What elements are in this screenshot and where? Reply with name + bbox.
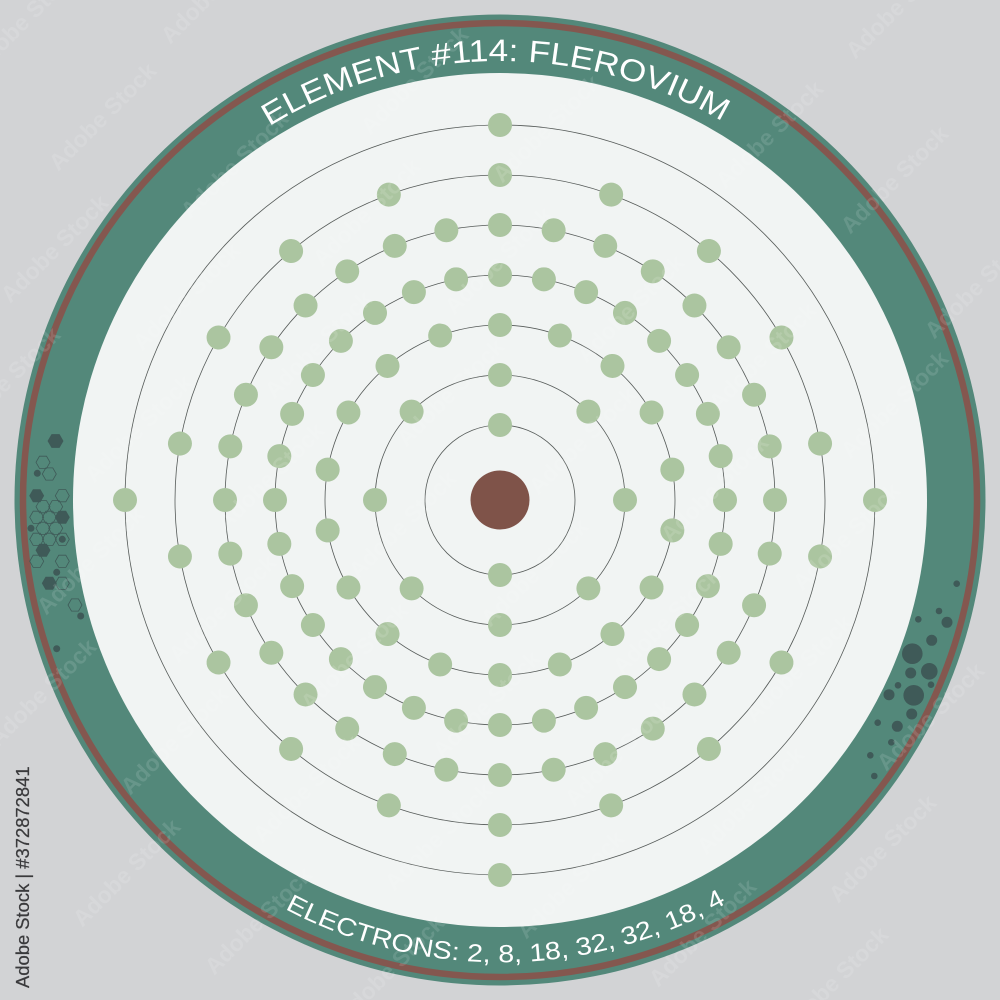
watermark: repeated Adobe Stock text: Adobe Stock <box>691 741 809 859</box>
watermark: repeated Adobe Stock text: Adobe Stock <box>295 597 413 715</box>
watermark: repeated Adobe Stock text: Adobe Stock <box>607 561 725 679</box>
watermark: repeated Adobe Stock text: Adobe Stock <box>835 345 953 463</box>
electron orbits <box>125 125 875 875</box>
watermark: repeated Adobe Stock text: Adobe Stock <box>487 69 605 187</box>
watermark: repeated Adobe Stock text: Adobe Stock <box>710 75 828 193</box>
watermark: repeated Adobe Stock text: Adobe Stock <box>199 861 317 979</box>
watermark: repeated Adobe Stock text: Adobe Stock <box>79 369 197 487</box>
shell 3: 18 electrons <box>314 313 686 687</box>
watermark: repeated Adobe Stock text: Adobe Stock <box>115 681 233 799</box>
watermark: repeated Adobe Stock text: Adobe Stock <box>475 513 593 631</box>
caption: electron configuration along arc: ELECTRONS: 2, 8, 18, 32, 32, 18, 4 <box>287 890 724 966</box>
electrons: all shells <box>113 113 887 887</box>
shell 7: 4 electrons <box>113 113 887 887</box>
watermark: repeated Adobe Stock text: Adobe Stock <box>523 381 641 499</box>
icon: bubble cluster on right of ring <box>867 580 960 779</box>
watermark: repeated Adobe Stock text: Adobe Stock <box>379 777 497 895</box>
shell 2: 8 electrons <box>363 363 637 637</box>
shell 4: 32 electrons <box>263 263 737 737</box>
watermark: repeated Adobe Stock text: Adobe Stock <box>871 657 989 775</box>
watermark: repeated Adobe Stock text: Adobe Stock <box>391 333 509 451</box>
watermark: repeated Adobe Stock text: Adobe Stock <box>175 105 293 223</box>
watermark: repeated Adobe Stock text: Adobe Stock <box>559 693 677 811</box>
watermark: repeated Adobe Stock text: Adobe Stock <box>787 477 905 595</box>
watermark: repeated Adobe Stock text: Adobe Stock <box>211 417 329 535</box>
watermark: repeated Adobe Stock text: Adobe Stock <box>703 297 821 415</box>
shell 1: 2 electrons <box>488 413 512 587</box>
watermark: repeated Adobe Stock text: Adobe Stock <box>835 120 953 238</box>
watermark: repeated Adobe Stock text: Adobe Stock <box>739 609 857 727</box>
watermark: repeated Adobe Stock text: Adobe Stock <box>259 285 377 403</box>
title: element name along arc: ELEMENT #114: FLEROVIUM <box>260 40 730 125</box>
watermark: repeated Adobe Stock text: Adobe Stock <box>655 429 773 547</box>
shell 6: 18 electrons <box>166 163 834 837</box>
watermark: repeated Adobe Stock text: Adobe Stock <box>427 645 545 763</box>
watermark: repeated Adobe Stock text: Adobe Stock <box>247 729 365 847</box>
watermark: repeated Adobe Stock text: Adobe Stock <box>643 873 761 991</box>
watermark: repeated Adobe Stock text: Adobe Stock <box>355 21 473 139</box>
nucleus <box>470 470 530 530</box>
watermark: repeated Adobe Stock text: Adobe Stock <box>439 201 557 319</box>
shell 5: 32 electrons <box>213 213 787 787</box>
watermark: repeated Adobe Stock text: Adobe Stock <box>127 237 245 355</box>
icon: hexagon cluster on left of ring <box>28 434 84 652</box>
watermark: repeated Adobe Stock text: Adobe Stock <box>343 465 461 583</box>
watermark: repeated Adobe Stock text: Adobe Stock <box>31 501 149 619</box>
watermark: repeated Adobe Stock text: Adobe Stock <box>571 249 689 367</box>
watermark: repeated Adobe Stock text: Adobe Stock <box>67 813 185 931</box>
watermark: repeated Adobe Stock text: Adobe Stock <box>163 549 281 667</box>
watermark: repeated Adobe Stock text: Adobe Stock <box>307 153 425 271</box>
watermark: repeated Adobe Stock text: Adobe Stock <box>43 57 161 175</box>
watermark: repeated Adobe Stock text: Adobe Stock <box>511 825 629 943</box>
stock credit: vertical text: Adobe Stock | #372872841 <box>12 766 33 988</box>
watermark: repeated Adobe Stock text: Adobe Stock <box>823 789 941 907</box>
panel: inner white disc <box>73 73 927 927</box>
